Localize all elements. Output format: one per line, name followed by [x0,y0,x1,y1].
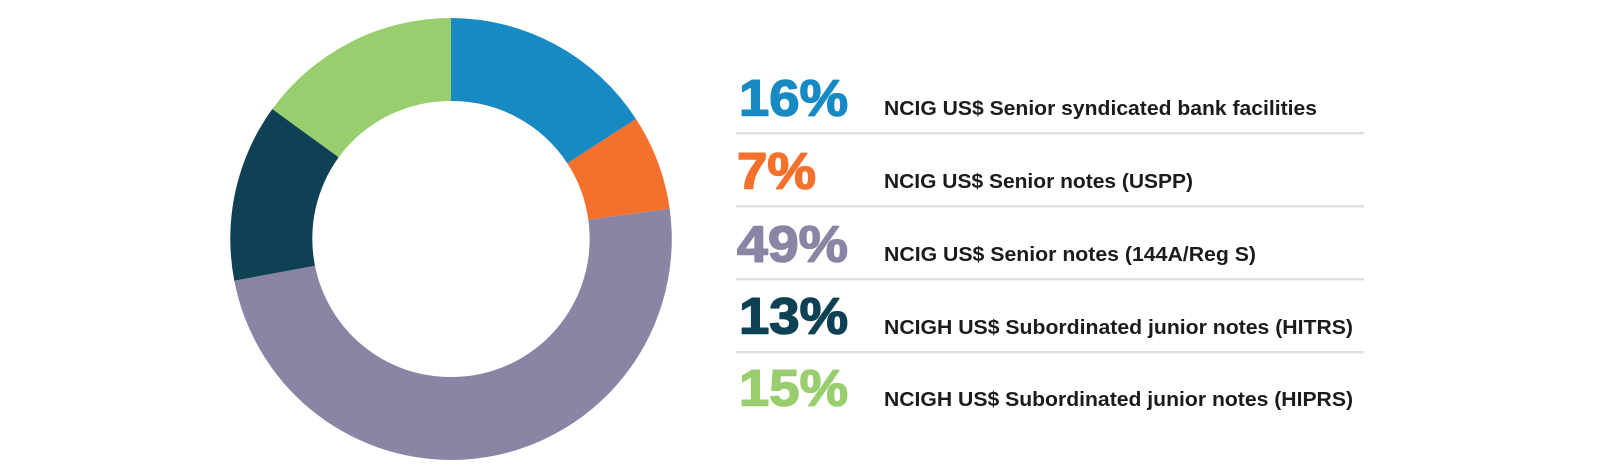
label: NCIG US$ Senior notes (144A/Reg S) [884,244,1256,266]
label: NCIGH US$ Subordinated junior notes (HIPRS) [884,389,1353,411]
row: 7% senior notes USPP [737,142,1193,200]
percentage 13%: 13% [739,288,848,344]
percentage 16%: 16% [739,70,848,126]
row: 15% subordinated junior notes HIPRS [739,360,1353,416]
row: 16% senior syndicated bank facilities [739,70,1317,126]
segment: 49% purple-grey [234,209,672,460]
percentage 15%: 15% [739,360,848,416]
label: NCIG US$ Senior syndicated bank facilities [884,98,1317,120]
label: NCIG US$ Senior notes (USPP) [884,171,1193,193]
segment: 16% blue [451,18,636,163]
legend [736,70,1364,416]
donut chart [230,18,672,460]
percentage 49%: 49% [737,216,848,272]
row: 13% subordinated junior notes HITRS [739,288,1353,344]
segment: 15% green [272,18,451,157]
label: NCIGH US$ Subordinated junior notes (HITRS) [884,317,1353,339]
segment: 7% orange [567,119,670,220]
percentage 7%: 7% [737,142,816,200]
segment: 13% dark teal [230,109,339,281]
row: 49% senior notes 144A/Reg S [737,216,1256,272]
